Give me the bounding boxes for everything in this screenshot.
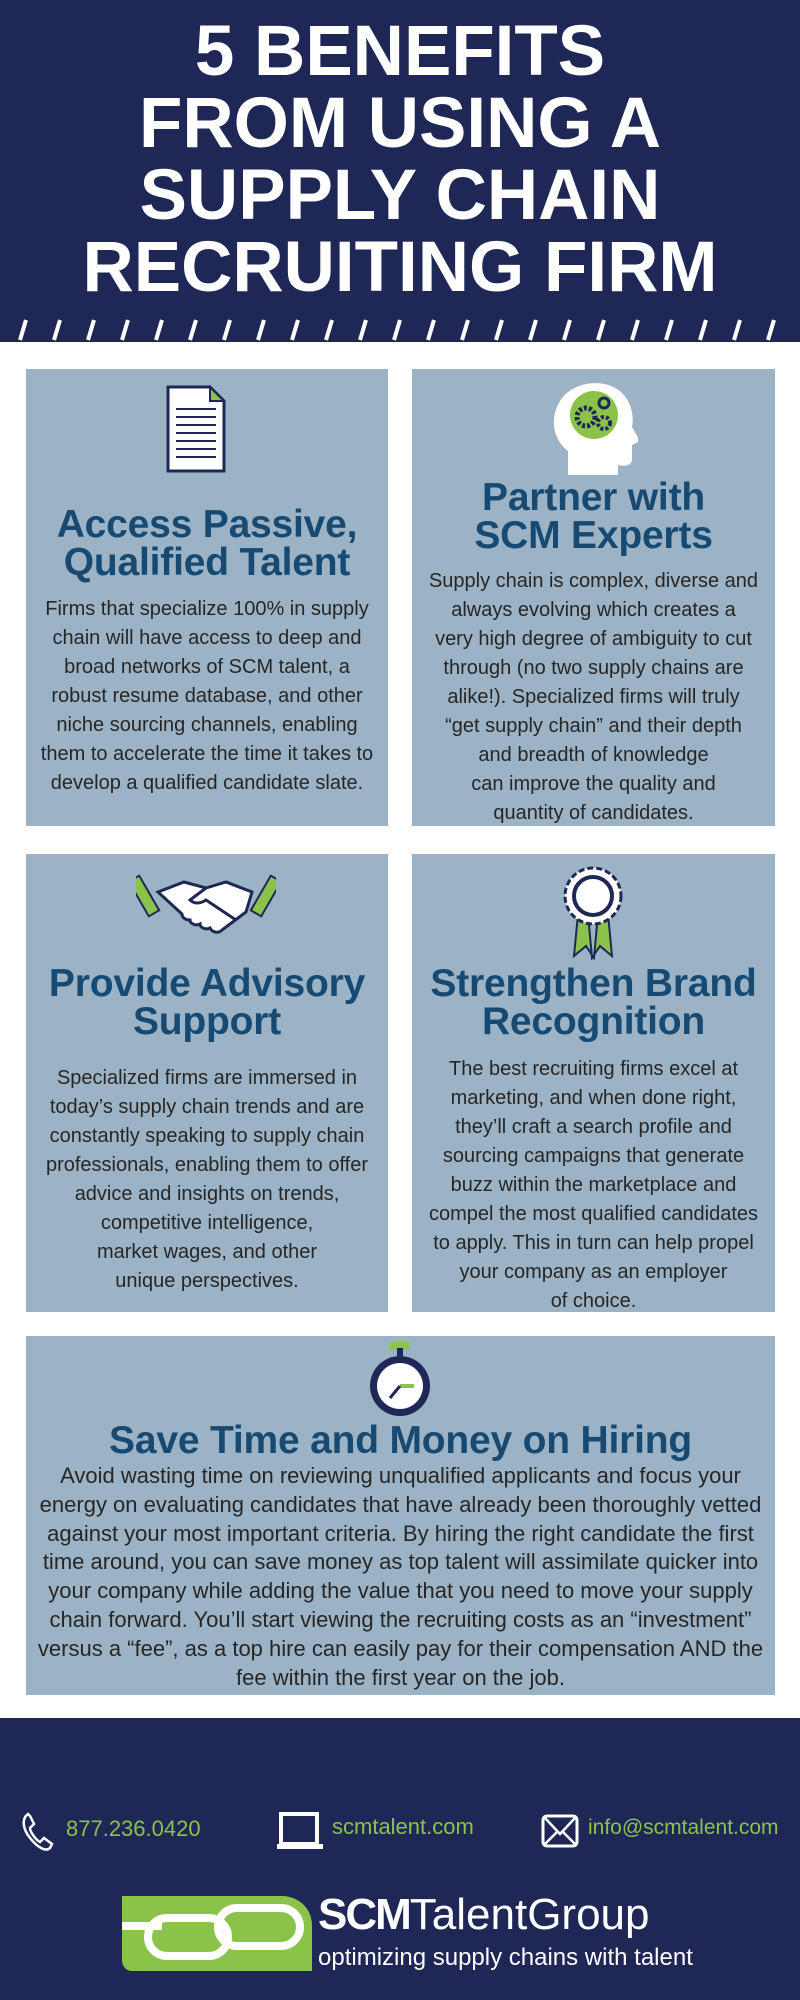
contact: website: scmtalent.com [332, 1814, 474, 1839]
text: competitive intelligence, [101, 1212, 313, 1234]
text: niche sourcing channels, enabling [56, 714, 358, 736]
contact: phone [22, 1812, 201, 1851]
heading: SCM Experts [474, 514, 713, 557]
text [41, 598, 373, 794]
text: alike!). Specialized firms will truly [447, 686, 740, 708]
text: professionals, enabling them to offer [46, 1154, 368, 1176]
title: SUPPLY CHAIN [140, 156, 660, 235]
heading [57, 503, 357, 584]
logo: SCMTalentGroup [318, 1890, 649, 1939]
text: time around, you can save money as top talent will assimilate quicker into [43, 1549, 758, 1574]
text: Avoid wasting time on reviewing unqualified applicants and focus your [60, 1463, 741, 1488]
panel: access passive talent [26, 369, 388, 826]
contact: phone: 877.236.0420 [66, 1816, 201, 1841]
text: sourcing campaigns that generate [443, 1145, 744, 1167]
text: The best recruiting firms excel at [449, 1058, 738, 1080]
title: RECRUITING FIRM [82, 228, 718, 307]
text: they’ll craft a search profile and [455, 1116, 732, 1138]
text: through (no two supply chains are [443, 657, 744, 679]
icon: award ribbon [564, 866, 622, 960]
text: “get supply chain” and their depth [445, 715, 742, 737]
text: always evolving which creates a [451, 599, 736, 621]
text: of choice. [551, 1290, 636, 1312]
heading: Provide Advisory [49, 962, 365, 1005]
icon: stopwatch [370, 1342, 430, 1416]
heading: Save Time and Money on Hiring [109, 1419, 692, 1462]
text: fee within the first year on the job. [236, 1665, 565, 1690]
text: marketing, and when done right, [451, 1087, 736, 1109]
text: constantly speaking to supply chain [50, 1125, 364, 1147]
contact: email [542, 1814, 779, 1848]
heading: Recognition [482, 1000, 705, 1043]
text: compel the most qualified candidates [429, 1203, 758, 1225]
icon: document [166, 384, 226, 472]
panel: save time and money [26, 1336, 775, 1695]
text: chain will have access to deep and [52, 627, 362, 649]
heading: Support [133, 1000, 281, 1043]
panel: advisory support [26, 854, 388, 1312]
heading [430, 962, 757, 1043]
text: buzz within the marketplace and [451, 1174, 736, 1196]
text: and breadth of knowledge [478, 744, 709, 766]
text: Supply chain is complex, diverse and [429, 570, 758, 592]
text: broad networks of SCM talent, a [64, 656, 350, 678]
text [429, 570, 758, 824]
text: chain forward. You’ll start viewing the recruiting costs as an “investment” [50, 1607, 751, 1632]
heading: Strengthen Brand [430, 962, 757, 1005]
title [82, 12, 718, 307]
heading [474, 476, 713, 557]
text: to apply. This in turn can help propel [433, 1232, 754, 1254]
text: advice and insights on trends, [75, 1183, 339, 1205]
heading [49, 962, 366, 1043]
text: energy on evaluating candidates that have already been thoroughly vetted [40, 1492, 761, 1517]
heading: Access Passive, [57, 503, 357, 546]
text: develop a qualified candidate slate. [51, 772, 363, 794]
logo [122, 1890, 693, 1971]
title: FROM USING A [139, 84, 661, 163]
text: robust resume database, and other [51, 685, 363, 707]
icon: head with gears [554, 383, 638, 475]
text [38, 1463, 763, 1690]
panel: partner with experts [412, 369, 775, 826]
icon: handshake [136, 874, 276, 934]
text: market wages, and other [97, 1241, 317, 1263]
heading: Qualified Talent [64, 541, 350, 584]
text: very high degree of ambiguity to cut [435, 628, 752, 650]
text: Specialized firms are immersed in [57, 1067, 357, 1089]
panel: brand recognition [412, 854, 775, 1312]
text: Firms that specialize 100% in supply [45, 598, 369, 620]
logo: optimizing supply chains with talent [318, 1944, 693, 1971]
text [46, 1067, 368, 1292]
header [0, 0, 800, 342]
text: today’s supply chain trends and are [50, 1096, 364, 1118]
text: against your most important criteria. By hiring the right candidate the first [47, 1521, 754, 1546]
heading: Partner with [482, 476, 705, 519]
footer [0, 1718, 800, 2000]
text: quantity of candidates. [493, 802, 694, 824]
contact: website [277, 1812, 474, 1849]
text: them to accelerate the time it takes to [41, 743, 373, 765]
text: your company while adding the value that you need to move your supply [48, 1578, 753, 1603]
text: can improve the quality and [471, 773, 716, 795]
contact: email: info@scmtalent.com [588, 1816, 779, 1839]
text: versus a “fee”, as a top hire can easily pay for their compensation AND the [38, 1636, 763, 1661]
text: unique perspectives. [115, 1270, 299, 1292]
text [429, 1058, 758, 1312]
text: your company as an employer [460, 1261, 727, 1283]
title: 5 BENEFITS [195, 12, 605, 91]
